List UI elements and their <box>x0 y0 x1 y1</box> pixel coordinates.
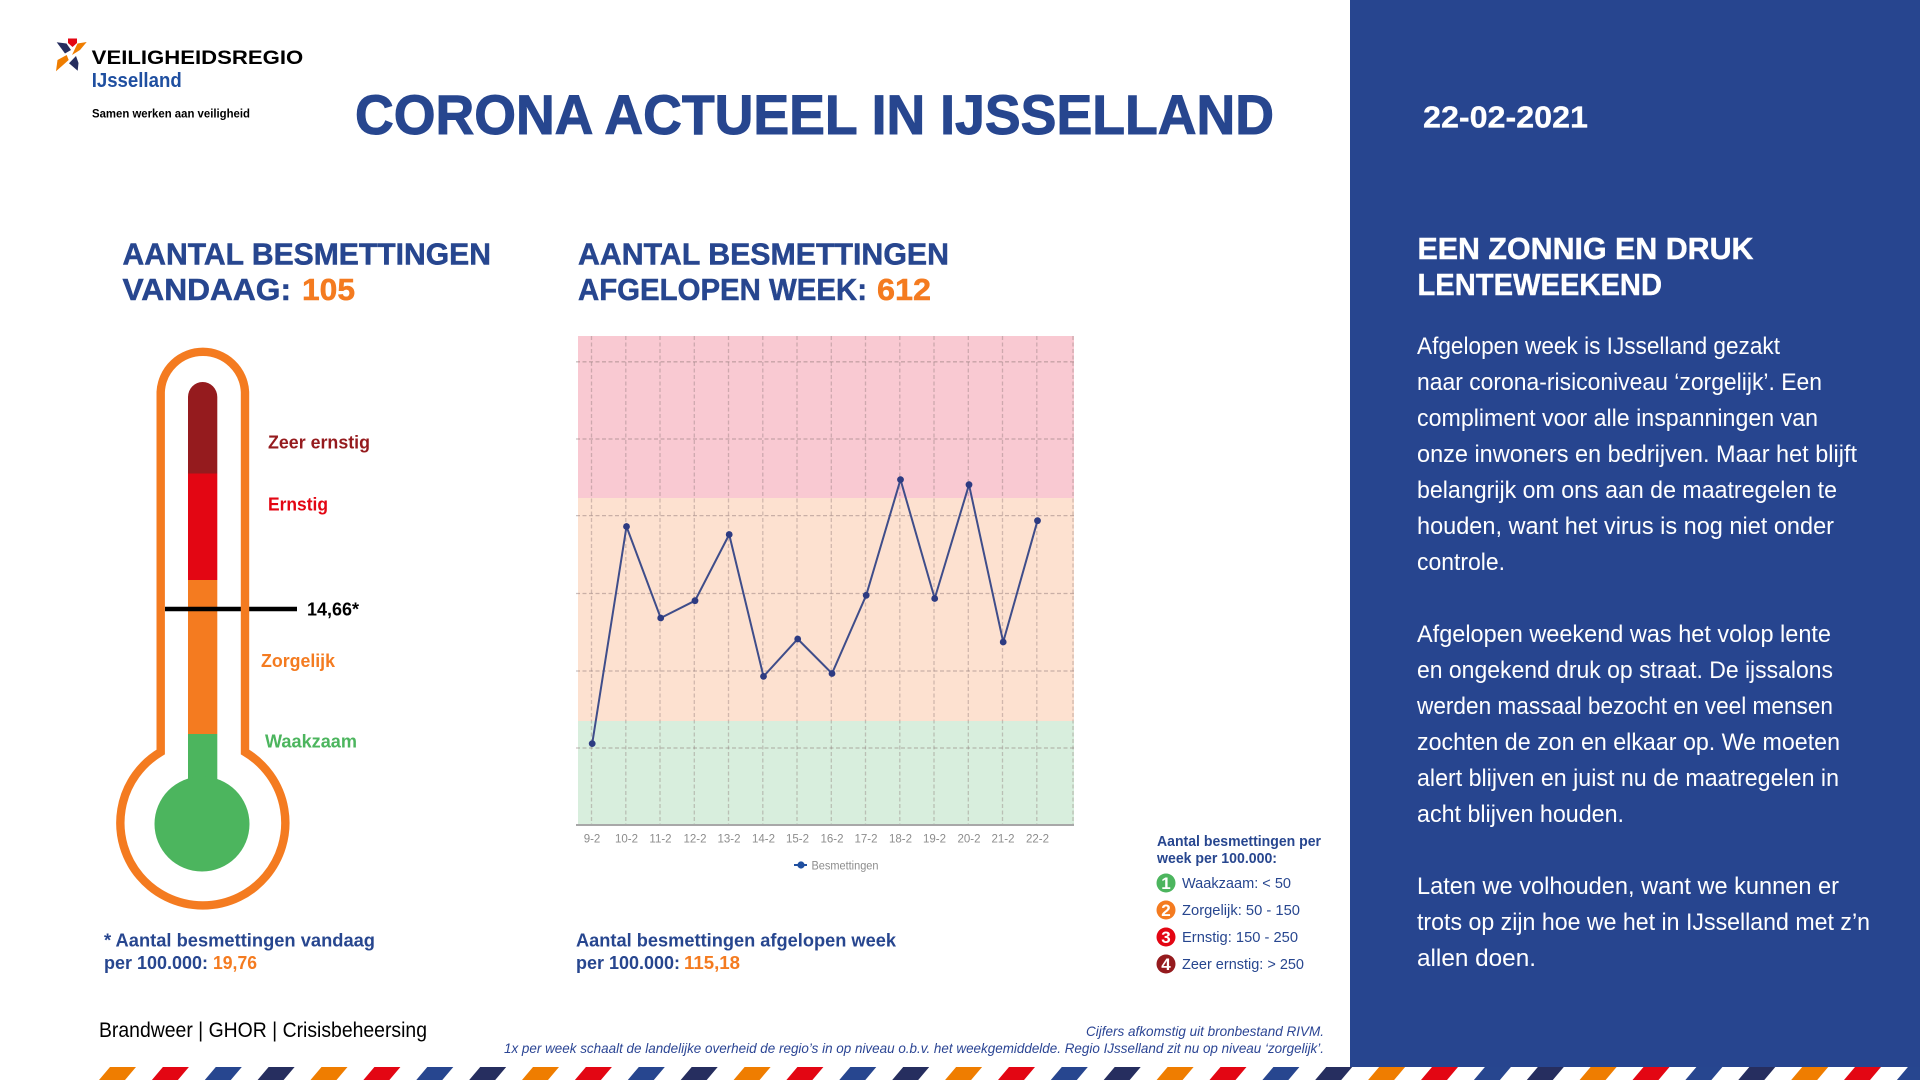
line chart: infections per day: 15-2 <box>786 834 809 846</box>
footer: source note: Cijfers afkomstig uit bronbestand RIVM. <box>1086 1023 1324 1039</box>
line chart: infections per day <box>576 336 1074 872</box>
footer: services: Brandweer | GHOR | Crisisbeheersing <box>99 1019 427 1042</box>
side panel paragraph 2: werden massaal bezocht en veel mensen <box>1416 693 1833 720</box>
legend: risk levels: week per 100.000: <box>1156 851 1277 867</box>
side panel paragraph 1: compliment voor alle inspanningen van <box>1417 405 1818 432</box>
legend: risk levels <box>1156 834 1321 974</box>
line chart: infections per day: 12-2 <box>683 834 707 846</box>
side panel paragraph 2: acht blijven houden. <box>1417 801 1624 828</box>
side panel paragraph 2: en ongekend druk op straat. De ijssalons <box>1417 657 1833 684</box>
level 2 <box>1156 900 1300 920</box>
level label: worrying: Zorgelijk <box>261 650 336 671</box>
side panel paragraph 1: Afgelopen week is IJsselland gezakt <box>1417 333 1780 360</box>
level 2: Zorgelijk: 50 - 150 <box>1182 903 1300 919</box>
line chart: infections per day: 22-2 <box>1026 834 1049 846</box>
logo: Veiligheidsregio IJsselland: IJsselland <box>92 70 182 92</box>
side panel paragraph 3 <box>1417 873 1870 972</box>
level 3: 3 <box>1161 928 1171 947</box>
line chart: infections per day: 18-2 <box>889 834 912 846</box>
side panel paragraph 2: alert blijven en juist nu de maatregelen in <box>1417 765 1839 792</box>
heading: infections past week: AFGELOPEN WEEK: <box>578 273 867 307</box>
side panel paragraph 1: houden, want het virus is nog niet onder <box>1417 513 1834 540</box>
side panel paragraph 1 <box>1417 333 1857 576</box>
level label: vigilant: Waakzaam <box>265 730 357 752</box>
side panel paragraph 1: naar corona-risiconiveau ‘zorgelijk’. Een <box>1417 369 1822 396</box>
line chart: infections per day: 16-2 <box>820 834 844 846</box>
level label: very serious: Zeer ernstig <box>268 432 370 452</box>
footer: source note: 1x per week schaalt de landelijke overheid de regio’s in op niveau o.b.v. het weekgemiddelde. Regio IJsselland zit nu op niveau ‘zorgelijk’. <box>504 1040 1324 1056</box>
title: CORONA ACTUEEL IN IJSSELLAND <box>355 83 1274 146</box>
footnote: past week per 100,000 <box>576 930 897 973</box>
footnote: past week per 100,000: per 100.000: <box>576 953 680 973</box>
level 4: 4 <box>1161 955 1171 974</box>
footnote: past week per 100,000: 115,18 <box>684 953 740 973</box>
level 1 <box>1156 874 1291 893</box>
level 1: 1 <box>1161 874 1171 893</box>
side panel paragraph 2: zochten de zon en elkaar op. We moeten <box>1417 729 1840 756</box>
panel: blue side panel <box>1350 0 1920 1067</box>
side panel paragraph 3: trots op zijn hoe we het in IJsselland met z’n <box>1417 909 1870 936</box>
line chart: infections per day: 10-2 <box>615 834 638 846</box>
side panel heading: EEN ZONNIG EN DRUK <box>1418 231 1754 266</box>
level 2: 2 <box>1161 901 1171 920</box>
heading: infections today: VANDAAG: <box>122 273 291 307</box>
line chart: infections per day: 14-2 <box>752 834 775 846</box>
side panel paragraph 2: Afgelopen weekend was het volop lente <box>1417 621 1831 648</box>
footnote: today per 100,000 <box>104 930 375 973</box>
line chart: infections per day: 9-2 <box>584 834 600 846</box>
level 3: Ernstig: 150 - 250 <box>1182 930 1298 946</box>
side panel paragraph 3: Laten we volhouden, want we kunnen er <box>1417 873 1839 900</box>
heading: infections today <box>122 238 491 307</box>
level 1: Waakzaam: < 50 <box>1182 876 1291 892</box>
line chart: infections per day: 19-2 <box>923 834 946 846</box>
line chart: infections per day: 21-2 <box>991 834 1015 846</box>
logo: Veiligheidsregio IJsselland: Samen werken aan veiligheid <box>92 108 250 120</box>
footnote: today per 100,000: * Aantal besmettingen vandaag <box>104 930 375 950</box>
line chart: infections per day: 13-2 <box>717 834 741 846</box>
logo: Veiligheidsregio IJsselland: VEILIGHEIDSREGIO <box>92 47 303 69</box>
side panel paragraph 1: belangrijk om ons aan de maatregelen te <box>1417 477 1837 504</box>
line chart: infections per day: 20-2 <box>957 834 981 846</box>
level label: serious: Ernstig <box>268 494 328 514</box>
side panel paragraph 3: allen doen. <box>1417 945 1536 972</box>
line chart: infections per day: 17-2 <box>854 834 878 846</box>
airmail stripe border <box>99 1067 1920 1080</box>
level 3 <box>1156 928 1298 947</box>
line chart: infections per day: 11-2 <box>649 834 672 846</box>
level 4 <box>1156 954 1304 974</box>
heading: infections today: AANTAL BESMETTINGEN <box>122 238 491 272</box>
side panel paragraph 1: onze inwoners en bedrijven. Maar het blijft <box>1417 441 1857 468</box>
side panel heading <box>1418 231 1754 302</box>
logo: Veiligheidsregio IJsselland <box>56 38 303 120</box>
heading: infections today: 105 <box>302 273 355 307</box>
side panel paragraph 1: controle. <box>1417 549 1505 576</box>
level 4: Zeer ernstig: > 250 <box>1182 957 1304 973</box>
thermometer <box>120 352 370 905</box>
heading: infections past week <box>578 238 949 307</box>
heading: infections past week: AANTAL BESMETTINGEN <box>578 238 949 272</box>
legend: risk levels: Aantal besmettingen per <box>1157 834 1321 850</box>
footnote: past week per 100,000: Aantal besmettingen afgelopen week <box>576 930 897 950</box>
footnote: today per 100,000: per 100.000: <box>104 953 208 973</box>
side panel heading: LENTEWEEKEND <box>1418 267 1662 302</box>
footnote: today per 100,000: 19,76 <box>213 953 257 973</box>
chart legend: Besmettingen <box>812 860 878 872</box>
heading: infections past week: 612 <box>877 273 931 307</box>
date: 22-02-2021 <box>1423 100 1588 134</box>
value marker label: 14,66* <box>307 600 359 620</box>
footer: source note <box>504 1023 1324 1056</box>
side panel paragraph 2 <box>1416 621 1840 828</box>
